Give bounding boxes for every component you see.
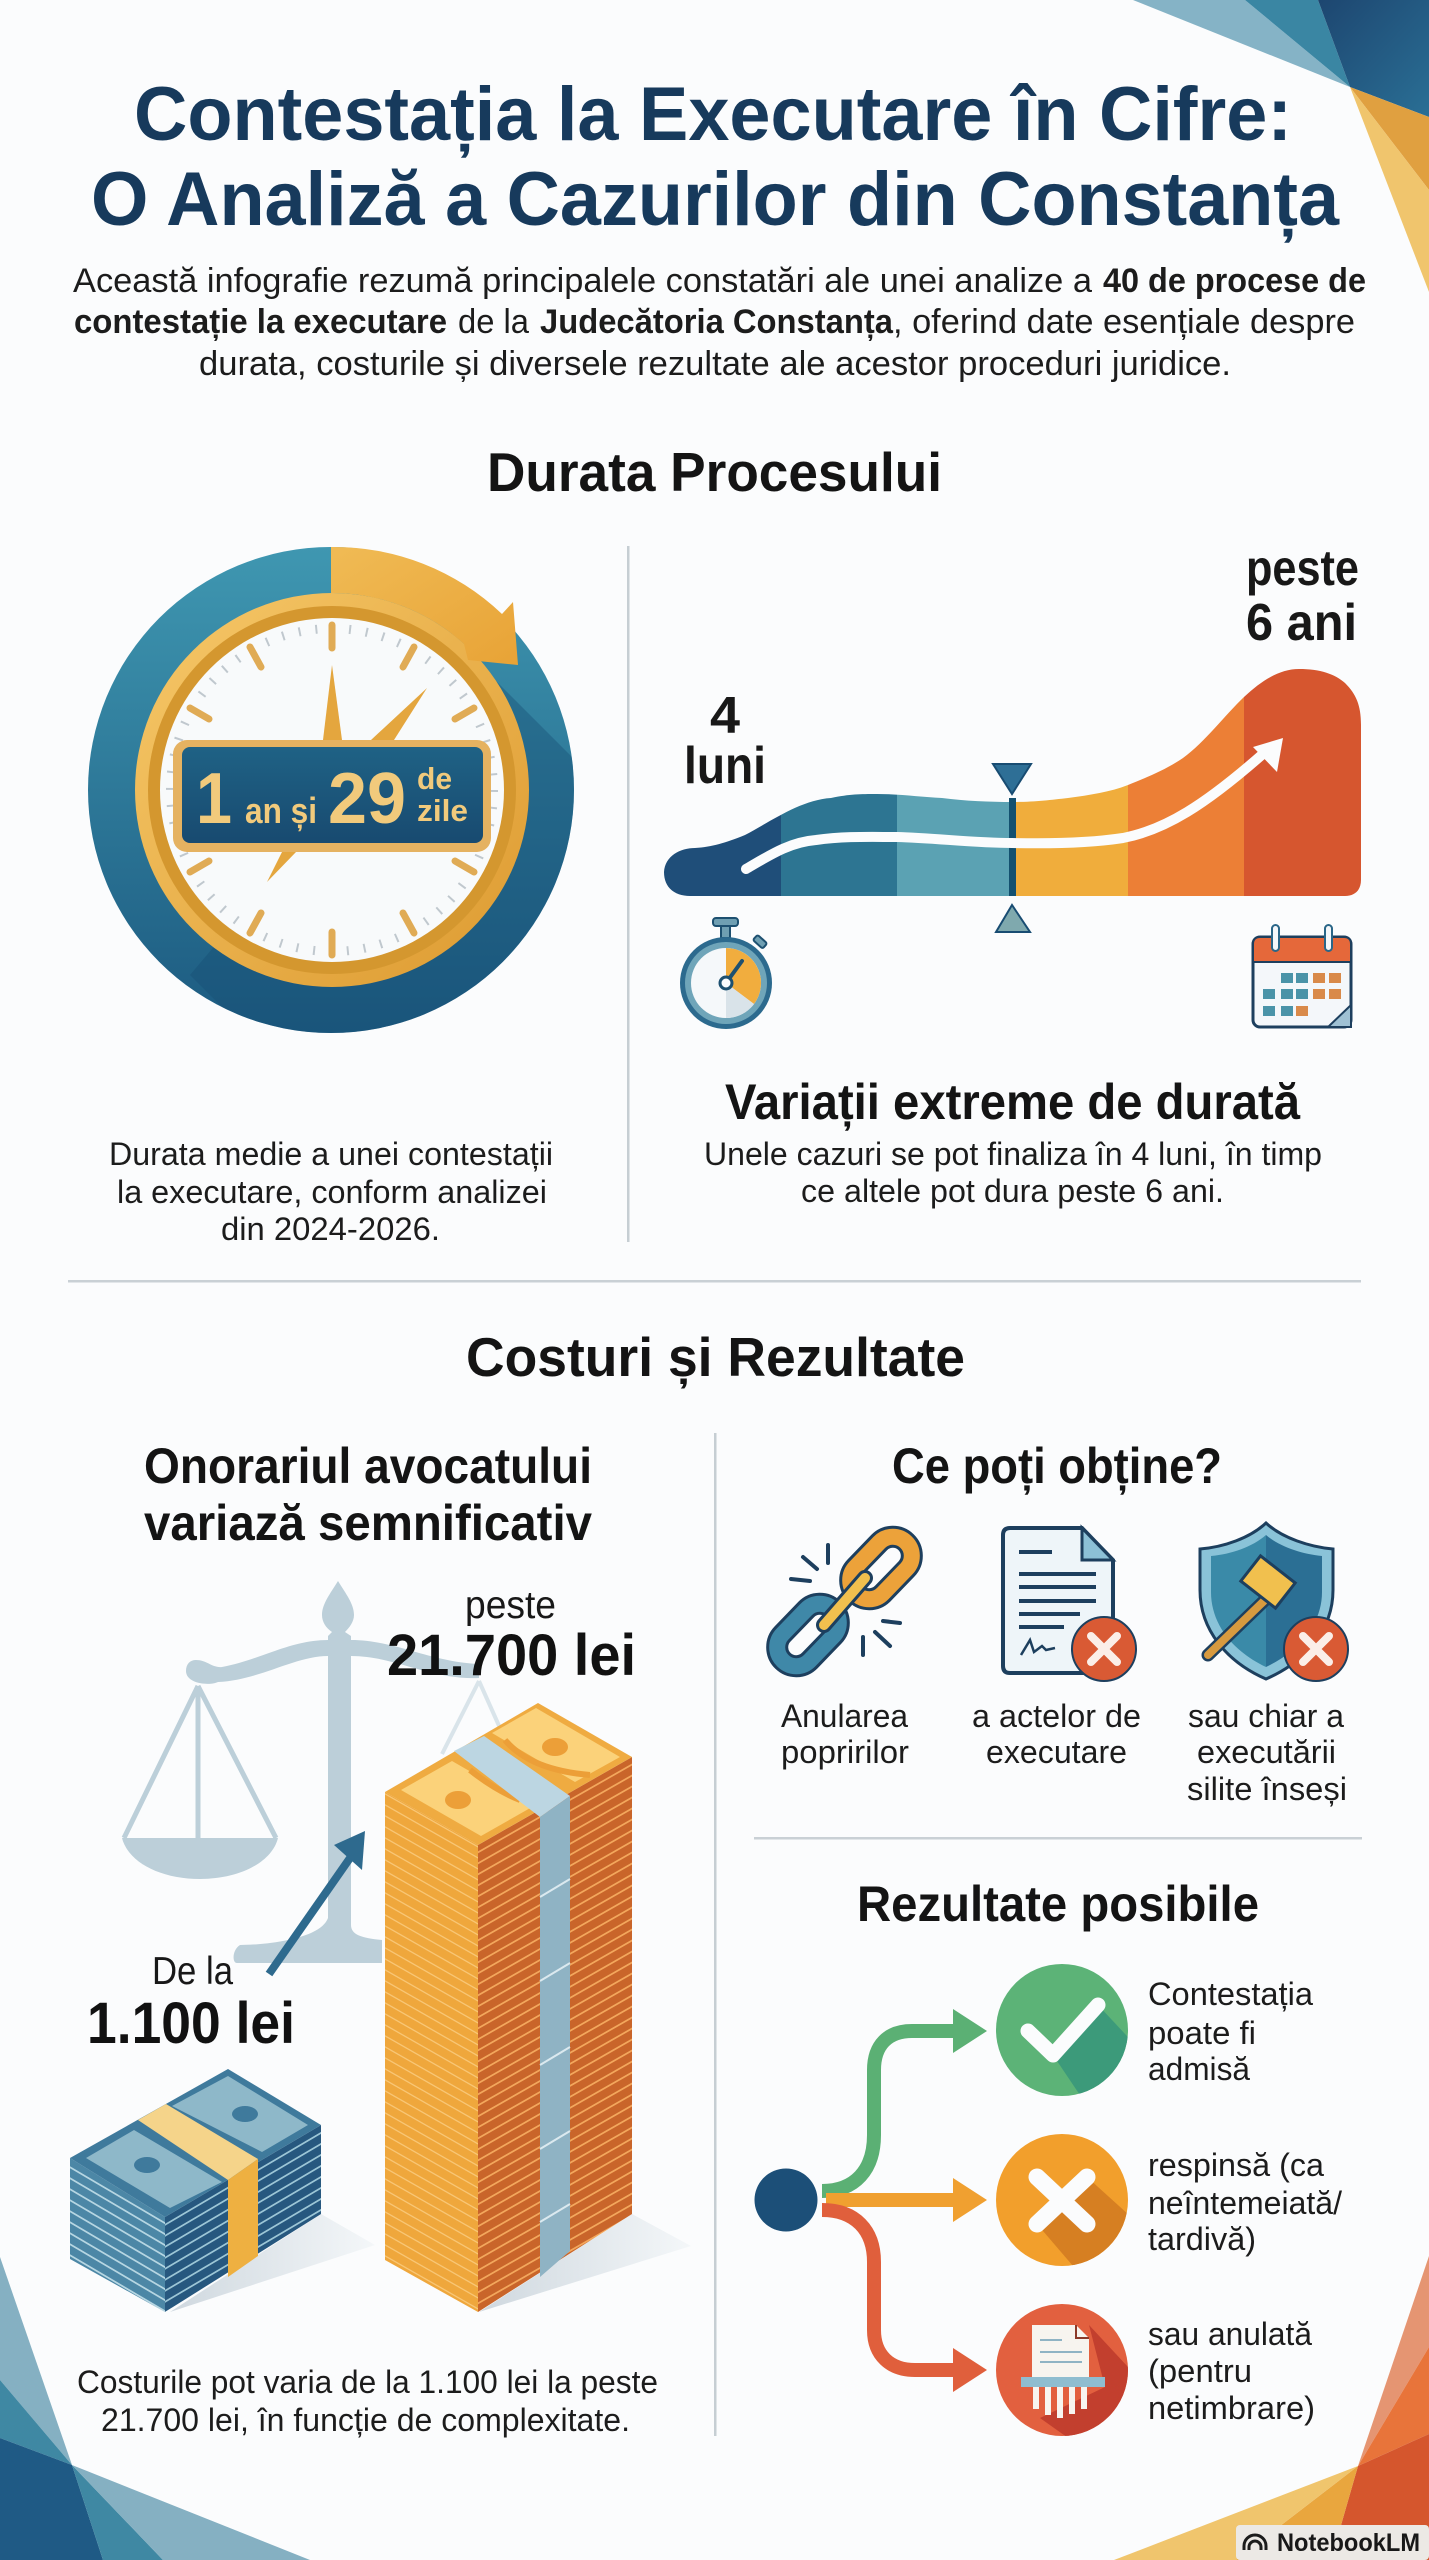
outcome: annulled: sau anulată: [1148, 2316, 1312, 2352]
intro paragraph: , oferind date esențiale despre: [893, 303, 1355, 341]
icon: cancelled document: [1003, 1528, 1136, 1681]
caption: costs: [77, 2364, 658, 2438]
outcome: annulled: netimbrare): [1148, 2390, 1315, 2426]
outcome: admitted: poate fi: [1148, 2015, 1256, 2051]
corner decoration: bottom left: [0, 2257, 310, 2560]
clock: average duration: 29: [328, 759, 406, 839]
label: 4 months: luni: [684, 737, 766, 795]
clock caption: din 2024-2026.: [221, 1211, 440, 1247]
labels: what can be annulled: executare: [986, 1734, 1127, 1770]
arrow: growth: [269, 1831, 365, 1974]
heading: lawyer fee: variază semnificativ: [144, 1495, 592, 1551]
labels: what can be annulled: [781, 1698, 1347, 1807]
caption: costs: 21.700 lei, în funcție de complexitate.: [101, 2402, 630, 2438]
labels: what can be annulled: popririlor: [781, 1734, 909, 1770]
heading and text: extreme duration variations: [704, 1074, 1322, 1209]
badge: NotebookLM: NotebookLM: [1277, 2529, 1420, 2557]
intro paragraph: 40 de procese de: [1103, 262, 1366, 300]
icon: large gold money stack: [385, 1703, 691, 2312]
heading: what you can obtain: Ce poți obține?: [892, 1438, 1222, 1494]
outcome: annulled: [996, 2304, 1313, 2436]
label: over 21,700 lei: [387, 1584, 636, 1688]
heading: lawyer fee: Onorariul avocatului: [144, 1438, 592, 1494]
heading: possible outcomes: Rezultate posibile: [857, 1876, 1259, 1932]
label: 6 years: peste: [1246, 540, 1359, 596]
heading: Durata Procesului: Durata Procesului: [487, 441, 942, 503]
heading and text: extreme duration variations: ce altele pot dura peste 6 ani.: [801, 1173, 1224, 1209]
clock: average duration: zile: [417, 793, 468, 828]
label: over 21,700 lei: peste: [465, 1584, 556, 1627]
intro paragraph: durata, costurile și diversele rezultate ale acestor proceduri juridice.: [199, 345, 1231, 383]
labels: what can be annulled: executării: [1197, 1734, 1336, 1770]
title: O Analiză a Cazurilor din Constanța: [91, 157, 1340, 243]
clock caption: [109, 1136, 553, 1247]
icon: calendar: [1253, 925, 1351, 1027]
outcome: rejected: [996, 2134, 1342, 2280]
heading: lawyer fee: [144, 1438, 592, 1551]
outcome: admitted: admisă: [1148, 2051, 1250, 2087]
intro paragraph: contestație la executare: [74, 303, 447, 341]
outcome: admitted: Contestația: [1148, 1976, 1313, 2012]
duration range chart: [660, 540, 1364, 932]
clock: average duration: 1: [196, 759, 232, 839]
heading and text: extreme duration variations: Variații extreme de durată: [725, 1074, 1301, 1130]
clock caption: Durata medie a unei contestații: [109, 1136, 553, 1172]
labels: what can be annulled: a actelor de: [972, 1698, 1141, 1734]
outcome: rejected: neîntemeiată/: [1148, 2185, 1342, 2221]
labels: what can be annulled: Anularea: [781, 1698, 908, 1734]
icon: stopwatch: [680, 918, 772, 1029]
labels: what can be annulled: sau chiar a: [1188, 1698, 1344, 1734]
icon: broken chain: [769, 1529, 920, 1674]
label: 6 years: 6 ani: [1246, 594, 1357, 652]
badge: NotebookLM: [1236, 2525, 1429, 2560]
outcome: admitted: [996, 1964, 1313, 2110]
label: over 21,700 lei: 21.700 lei: [387, 1623, 636, 1688]
label: from 1,100 lei: 1.100 lei: [87, 1991, 295, 2056]
labels: what can be annulled: silite înseși: [1187, 1771, 1347, 1807]
clock: average duration: [88, 547, 574, 1033]
label: 4 months: 4: [710, 687, 740, 745]
clock: average duration: an și: [245, 790, 317, 831]
intro paragraph: Judecătoria Constanța: [540, 303, 894, 341]
label: 6 years: [1246, 540, 1359, 652]
heading and text: extreme duration variations: Unele cazuri se pot finaliza în 4 luni, în timp: [704, 1136, 1322, 1172]
outcome: rejected: respinsă (ca: [1148, 2147, 1324, 2183]
clock: average duration: de: [417, 761, 452, 796]
icon: shield with gavel: [1200, 1523, 1348, 1681]
corner decoration: bottom right: [1114, 2256, 1429, 2560]
title: Contestația la Executare în Cifre:: [134, 72, 1292, 158]
outcome: rejected: tardivă): [1148, 2221, 1256, 2257]
intro paragraph: [73, 262, 1366, 383]
marker triangles: [993, 764, 1031, 932]
outcome: annulled: (pentru: [1148, 2353, 1252, 2389]
label: 4 months: [684, 687, 766, 795]
icon: balance scale: [122, 1581, 500, 1963]
title: [91, 72, 1340, 243]
caption: costs: Costurile pot varia de la 1.100 lei la peste: [77, 2364, 658, 2400]
corner decoration: top right: [1133, 0, 1429, 292]
clock caption: la executare, conform analizei: [117, 1174, 547, 1210]
intro paragraph: Această infografie rezumă principalele constatări ale unei analize a: [73, 262, 1092, 300]
label: from 1,100 lei: De la: [152, 1950, 233, 1993]
label: from 1,100 lei: [87, 1950, 295, 2056]
heading: Costuri și Rezultate: Costuri și Rezultate: [466, 1326, 965, 1389]
flow: possible outcomes branches: [754, 2009, 987, 2392]
intro paragraph: de la: [458, 303, 529, 341]
icon: small blue money stack: [70, 2069, 375, 2312]
